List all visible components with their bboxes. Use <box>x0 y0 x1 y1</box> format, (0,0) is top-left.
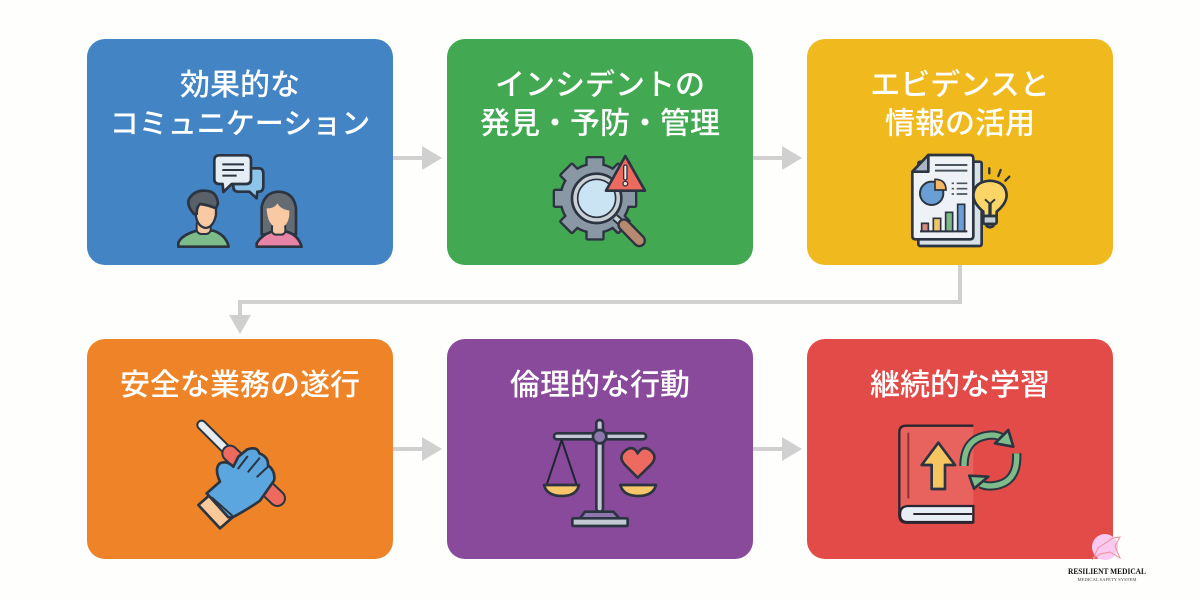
heading: safe work: 安全な業務の遂行 <box>120 369 360 402</box>
heading: effective communication: コミュニケーション <box>110 108 370 140</box>
arrow: panel 2 to panel 3 <box>753 146 802 170</box>
panel: evidence and information use <box>807 39 1113 265</box>
heading: evidence: エビデンスと <box>870 69 1050 102</box>
logo: Resilient Medical: RESILIENT MEDICAL <box>1068 567 1146 576</box>
arrow: panel 5 to panel 6 <box>753 437 802 461</box>
arrow: panel 4 to panel 5 <box>393 437 442 461</box>
panel: incident detection, prevention, management <box>447 39 753 265</box>
heading: evidence: 情報の活用 <box>885 108 1035 140</box>
panel: safe work execution <box>87 339 393 559</box>
heading: incident: 発見・予防・管理 <box>480 108 720 140</box>
icon: gear with magnifier and warning <box>555 156 645 241</box>
heading: ethical behaviour: 倫理的な行動 <box>510 369 690 402</box>
icon: gloved hand holding screwdriver <box>198 425 277 528</box>
logo: Resilient Medical: MEDICAL SAFETY SYSTEM <box>1078 577 1136 582</box>
heading: continuous learning: 継続的な学習 <box>870 369 1050 402</box>
arrow: panel 1 to panel 2 <box>393 146 442 170</box>
icon: two people talking <box>178 155 302 247</box>
panel: continuous learning <box>807 339 1113 559</box>
arrow: panel 3 down and back to panel 4 <box>229 265 962 334</box>
panel: ethical behaviour <box>447 339 753 559</box>
heading: effective communication: 効果的な <box>180 69 300 102</box>
logo: Resilient Medical <box>1068 534 1146 582</box>
icon: report and light bulb <box>912 155 1009 246</box>
heading: incident: インシデントの <box>495 69 705 102</box>
panel: effective communication <box>87 39 393 265</box>
icon: balance scale with heart <box>544 420 656 526</box>
icon: book with up arrow and cycle arrows <box>899 426 1017 523</box>
